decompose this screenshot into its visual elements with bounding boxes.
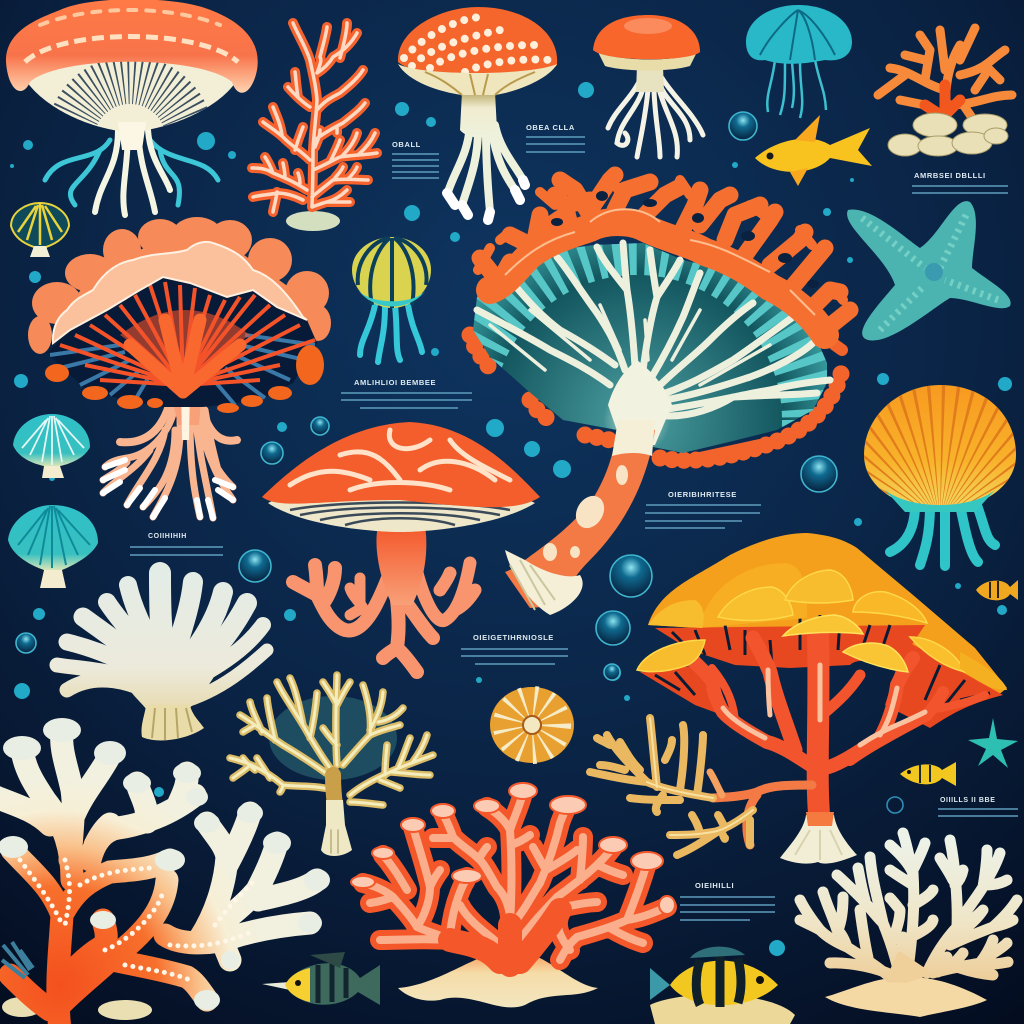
spotted mushroom <box>398 7 557 220</box>
large coral fan <box>462 175 850 615</box>
coral tips <box>351 783 675 914</box>
teal jellyfish <box>746 5 852 118</box>
small orange fish right <box>976 580 1018 600</box>
white branches <box>477 243 830 416</box>
label: open cell: OBEA CLLA <box>526 123 575 132</box>
coral dots <box>20 860 255 980</box>
trunk foot <box>780 815 857 864</box>
teal shell upper <box>13 414 90 478</box>
label: coral <box>392 140 439 178</box>
small starfish <box>968 718 1018 768</box>
coral feet <box>2 997 42 1017</box>
branches <box>690 630 985 825</box>
orange fringe <box>470 335 842 460</box>
jellyfish mushroom: top left <box>6 0 258 215</box>
label: orthinithese: OIERIBIHRITESE <box>668 490 737 499</box>
yellow fish <box>755 115 872 186</box>
red mushroom with tentacles <box>262 422 540 672</box>
coral: orange top <box>252 23 377 231</box>
label: shells: OIIILLS II BBE <box>940 797 995 804</box>
label: cornith <box>130 533 223 555</box>
tentacles <box>103 395 237 518</box>
cap back <box>648 533 1007 696</box>
mushroom tree <box>637 533 1007 864</box>
label: open cell <box>526 123 585 152</box>
fish with sand <box>650 947 795 1024</box>
label: orellillia <box>680 881 775 920</box>
gill masses <box>655 625 925 668</box>
inner cream ruffle <box>53 242 307 343</box>
small yellow fish right <box>900 762 956 786</box>
orange cap jellyfish <box>593 15 703 157</box>
large orange mushroom <box>28 217 331 518</box>
label: animal member: AMLIHLIOI BEMBEE <box>354 378 436 387</box>
glass bubbles <box>16 112 837 680</box>
sub caps <box>700 563 807 628</box>
coral crown <box>478 175 850 335</box>
fish: striped bottom left <box>262 952 380 1005</box>
round shell <box>490 687 574 763</box>
big left coral <box>0 718 330 1024</box>
label: amber shell <box>912 171 1008 193</box>
coral tip caps <box>0 718 330 1010</box>
small striped jelly <box>352 237 431 362</box>
label: orthinithese <box>645 490 761 528</box>
label: animal member <box>341 378 472 408</box>
ring bubble <box>887 797 903 813</box>
small yellow shell <box>11 203 69 257</box>
cap lobes <box>28 217 331 354</box>
label: operation: OIEIGETIHRNIOSLE <box>473 633 554 642</box>
stem <box>505 425 655 608</box>
orange coral and rocks <box>878 28 1012 156</box>
yellow coral branch <box>590 718 812 855</box>
starfish teal <box>847 201 1011 340</box>
gill orange tips <box>45 345 324 413</box>
beige coral <box>230 675 433 856</box>
red coral <box>351 783 675 1007</box>
label: coral: OBALL <box>392 140 421 149</box>
blue sea plant <box>2 942 33 978</box>
gills <box>47 277 317 407</box>
white coral fan <box>57 573 267 740</box>
orange shell jelly <box>864 385 1016 571</box>
label: orellillia: OIEIHILLI <box>695 881 734 890</box>
label: operation <box>461 633 568 664</box>
white coral right <box>800 833 1017 1017</box>
label: shells <box>938 797 1018 816</box>
label: amber shell: AMRBSEI DBLLLI <box>914 171 986 180</box>
label: cornith: COIIHIHIH <box>148 533 187 540</box>
teal shell lower <box>8 505 98 588</box>
